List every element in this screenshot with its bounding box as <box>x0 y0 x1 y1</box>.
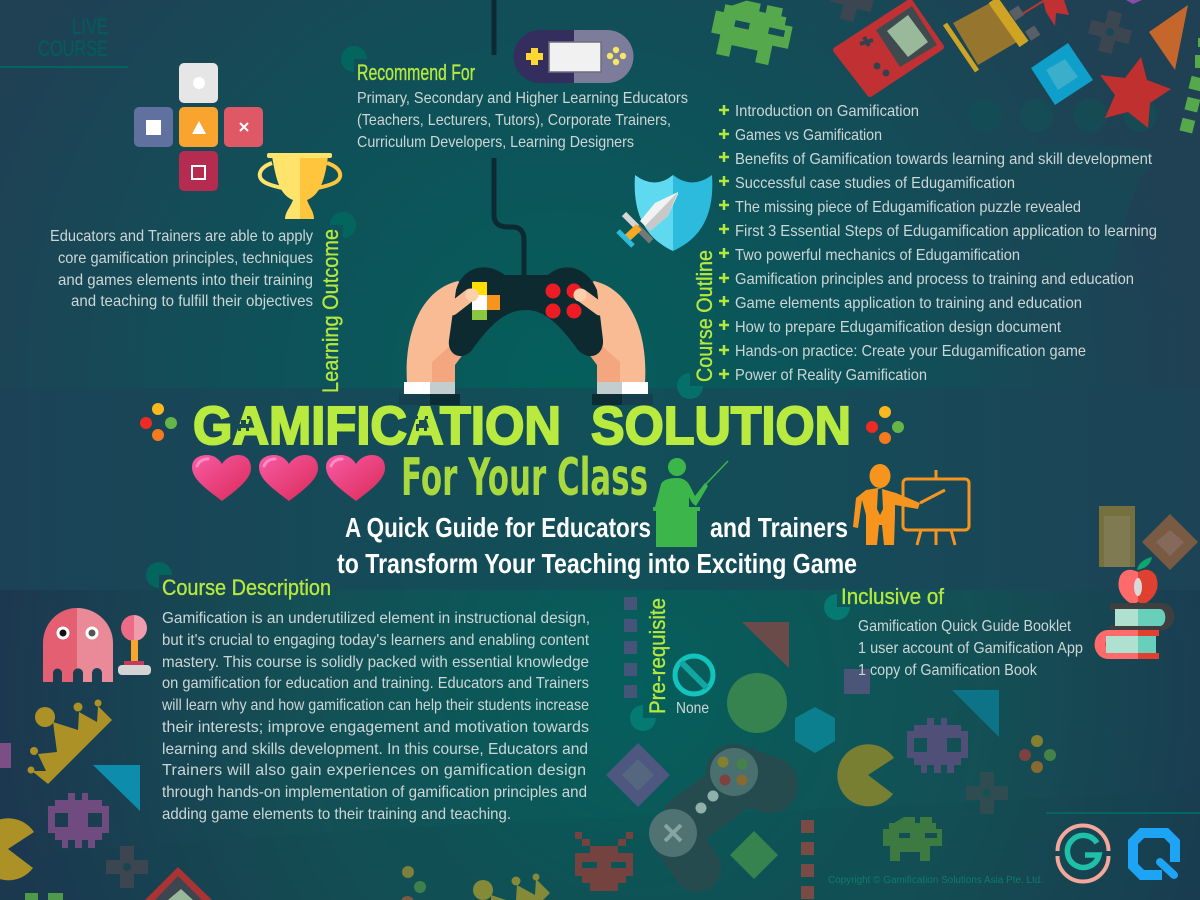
course outline list: Successful case studies of Edugamification <box>735 175 1015 192</box>
title: SOLUTION <box>591 396 851 456</box>
course outline heading: Course Outline <box>692 250 717 382</box>
icon: handheld gamepad <box>514 30 634 83</box>
icon: three hearts <box>192 455 385 501</box>
icon: bottom red diamond <box>145 867 212 900</box>
recommend for section: Curriculum Developers, Learning Designers <box>357 134 634 151</box>
course description heading: Course Description <box>162 575 331 600</box>
decorative game icons top right <box>707 0 1200 133</box>
icon: red invader <box>575 832 633 891</box>
recommend for section <box>357 60 688 151</box>
faded dots and crown bottom center <box>402 866 550 900</box>
icon: blue triangle <box>93 765 140 811</box>
recommend for section: Primary, Secondary and Higher Learning Educators <box>357 90 688 107</box>
icon: joystick <box>118 615 151 675</box>
icon: shield and sword <box>618 175 712 251</box>
headline text <box>337 512 857 579</box>
course description text: adding game elements to their training and teaching. <box>162 806 511 823</box>
course outline list: First 3 Essential Steps of Edugamification application to learning <box>735 223 1157 240</box>
course outline list: Power of Reality Gamification <box>735 367 927 384</box>
learning outcome heading: Learning Outcome <box>318 229 343 393</box>
learning outcome text <box>50 228 313 310</box>
inclusive of section: 1 copy of Gamification Book <box>858 662 1038 679</box>
recommend for section: Recommend For <box>357 60 475 85</box>
icon: colored dots left of title <box>140 403 177 441</box>
faded shapes center right <box>606 622 1056 899</box>
course description text <box>161 610 590 823</box>
controller cable <box>494 0 524 278</box>
green squares bottom left <box>25 893 63 900</box>
course description text: learning and skills development. In this course, Educators and <box>162 741 588 758</box>
course outline list: Game elements application to training and education <box>735 295 1082 312</box>
icon: purple invader <box>48 793 109 848</box>
course outline list: Hands-on practice: Create your Edugamification game <box>735 343 1086 360</box>
icon: apple and books <box>1095 557 1174 659</box>
inclusive of section <box>841 584 1083 679</box>
icon: presenter at board <box>853 464 969 545</box>
course description text: mastery. This course is solidly packed with essential knowledge <box>162 654 589 671</box>
inclusive of section: 1 user account of Gamification App <box>858 640 1083 657</box>
faded block shapes right <box>1099 506 1198 570</box>
learning outcome text: core gamification principles, techniques <box>58 250 313 267</box>
copyright: Copyright © Gamification Solutions Asia Pte. Ltd. <box>828 875 1043 886</box>
course description text: on gamification for education and training. Educators and Trainers <box>162 675 589 692</box>
inclusive of section: Inclusive of <box>841 584 945 609</box>
title <box>193 396 851 456</box>
title: GAMIFICATION <box>193 396 561 456</box>
footer divider <box>1046 812 1200 814</box>
logo: G <box>1058 826 1108 882</box>
icon: dark d-pad small <box>826 0 878 26</box>
learning outcome text: and games elements into their training <box>58 272 313 289</box>
course description text: Trainers will also gain experiences on gamification design <box>162 762 586 779</box>
course outline list: Two powerful mechanics of Edugamification <box>735 247 1020 264</box>
course outline list: Introduction on Gamification <box>735 103 919 120</box>
purple square column <box>624 597 637 698</box>
icon: hands holding game controller <box>399 267 653 405</box>
icon: handheld console <box>836 2 941 94</box>
course outline list: Benefits of Gamification towards learning and skill development <box>735 151 1153 168</box>
icon: red star <box>1100 57 1171 128</box>
accent quarter circles <box>146 46 850 731</box>
subtitle: for your class: For Your Class <box>401 448 648 508</box>
headline text: to Transform Your Teaching into Exciting Game <box>337 548 857 579</box>
plus bullets <box>719 105 729 379</box>
course outline list <box>735 103 1157 384</box>
recommend for section: (Teachers, Lecturers, Tutors), Corporate Trainers, <box>357 112 671 129</box>
icon: blue diamond <box>1031 43 1093 105</box>
course description text: Gamification is an underutilized element in instructional design, <box>162 610 590 627</box>
pre-requisite heading: Pre-requisite <box>645 598 670 714</box>
icon: colored dots right of title <box>866 406 904 444</box>
icon: bottom d-pad <box>106 846 148 888</box>
icon: faded large controller <box>649 748 770 868</box>
icon: gold crown <box>28 700 112 784</box>
course description text: but it's crucial to engaging today's learners and enabling content <box>162 632 590 649</box>
logo: Q <box>1133 833 1175 875</box>
green squares <box>1179 38 1200 133</box>
pre-requisite text: None <box>676 700 709 717</box>
live course label <box>0 14 128 68</box>
faded trophy and dots top right <box>968 98 1157 273</box>
icon: ghost <box>43 608 113 682</box>
icon: teacher at podium <box>653 458 728 547</box>
learning outcome text: and teaching to fulfill their objectives <box>71 293 313 310</box>
headline text: and Trainers <box>710 512 848 543</box>
icon: trophy <box>260 153 340 219</box>
course description text: will learn why and how gamification can help their students increase <box>161 697 589 714</box>
icon: orange triangle <box>1149 5 1188 70</box>
headline text: A Quick Guide for Educators <box>345 512 651 543</box>
course outline list: The missing piece of Edugamification puzzle revealed <box>735 199 1081 216</box>
purple fragment <box>1126 0 1142 4</box>
course outline list: How to prepare Edugamification design document <box>735 319 1062 336</box>
course description text: their interests; improve engagement and motivation towards <box>162 719 589 736</box>
live course label: LIVE <box>72 14 108 39</box>
learning outcome text: Educators and Trainers are able to apply <box>50 228 313 245</box>
course outline list: Games vs Gamification <box>735 127 882 144</box>
icon: dark d-pad <box>1084 6 1136 58</box>
inclusive of section: Gamification Quick Guide Booklet <box>858 618 1071 635</box>
live course label: COURSE <box>38 36 108 61</box>
icon: green invader <box>707 0 796 68</box>
icon: pacman <box>0 818 34 880</box>
icon: trophy scroll <box>945 0 1069 71</box>
course description text: through hands-on implementation of gamification principles and <box>162 784 587 801</box>
course outline list: Gamification principles and process to training and education <box>735 271 1134 288</box>
purple square <box>0 743 11 768</box>
icon: colored button cross <box>134 63 263 191</box>
icon: prohibited sign <box>675 656 713 694</box>
